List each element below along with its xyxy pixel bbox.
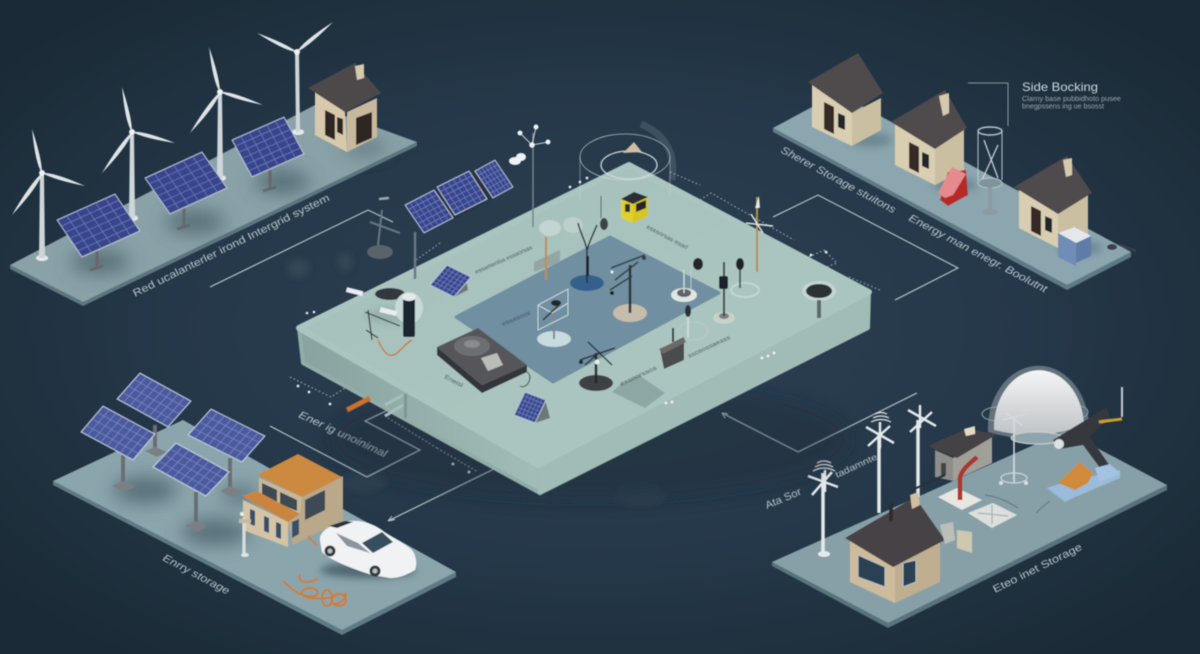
labels: bottom left bbox=[161, 409, 390, 597]
solar panels bbox=[57, 117, 304, 270]
small probes bbox=[673, 305, 708, 342]
small dark hut bbox=[659, 337, 686, 369]
glass ring sensor bbox=[580, 124, 673, 230]
left control cluster bbox=[346, 287, 423, 355]
orange and blue vehicle bbox=[1047, 462, 1120, 502]
dome bbox=[982, 366, 1089, 444]
sensor stand: ringed bbox=[671, 258, 703, 302]
labels: bottom right bbox=[763, 452, 1084, 596]
platform micro labels bbox=[443, 224, 732, 389]
labels: bottom left: Ener ig unoinimal bbox=[297, 409, 390, 461]
faint smudges bbox=[287, 253, 666, 506]
callout lines bbox=[210, 83, 1008, 521]
labels: top right: Sherer Storage stuitons bbox=[779, 144, 898, 217]
house bbox=[845, 475, 945, 603]
platform bbox=[773, 93, 1131, 290]
air turbines bbox=[808, 405, 936, 557]
supply boxes bbox=[940, 522, 972, 553]
panel: central platform bbox=[299, 124, 869, 493]
wind turbines bbox=[11, 20, 334, 261]
dark console bbox=[437, 328, 530, 393]
panel: solar and EV (bottom left) bbox=[53, 373, 456, 635]
shadows bbox=[70, 142, 387, 274]
house 2 bbox=[891, 90, 967, 185]
labels: bottom left: Enrry storage bbox=[161, 552, 232, 597]
white car bbox=[320, 521, 416, 578]
sensor stand: dark bbox=[579, 342, 615, 391]
small orange plug bbox=[308, 536, 317, 546]
orange cables bbox=[283, 574, 346, 606]
glass sensor mast bbox=[1000, 413, 1028, 484]
labels: top right: Energy man enegr. Boolutnt bbox=[907, 212, 1050, 296]
house shadows bbox=[848, 133, 1102, 255]
small solar panels bbox=[430, 265, 550, 423]
white plates and red pipe bbox=[938, 457, 1050, 528]
platform micro labels: Eneisl bbox=[443, 374, 464, 389]
house 1 bbox=[808, 53, 883, 146]
orange-roof building bbox=[242, 454, 343, 547]
callout: side booking: Clarny base pubbidhoto pusee bbox=[1022, 96, 1121, 103]
panel: air sensors and storage (bottom right) bbox=[772, 366, 1167, 628]
orange pole with grey box bbox=[534, 217, 583, 280]
platform bbox=[772, 431, 1167, 628]
orange pipe connector bbox=[347, 394, 407, 418]
weather pole and cloud bbox=[509, 124, 550, 227]
blue inner zone bbox=[456, 237, 719, 408]
labels: bottom right: Eteo inet Storage bbox=[991, 541, 1084, 596]
white connector dots bbox=[297, 177, 827, 473]
label: renewable system: Red ucalanterler irond Intergrid system bbox=[131, 192, 332, 300]
labels: bottom right: Ata Sor bbox=[763, 486, 804, 512]
platform micro labels: essasoos bbox=[501, 311, 531, 328]
sensor stand: column bbox=[713, 262, 735, 324]
platform bbox=[53, 420, 456, 635]
panel: houses (top right) bbox=[773, 53, 1136, 290]
callout: side booking bbox=[1022, 80, 1121, 110]
callout: side booking: Side Bocking bbox=[1022, 80, 1098, 94]
sensor stand: white with frame bbox=[537, 289, 571, 347]
blue battery box bbox=[1058, 227, 1091, 266]
house bbox=[308, 63, 381, 152]
red device bbox=[938, 167, 968, 206]
sensor stand: blue bbox=[570, 223, 604, 291]
platform micro labels: essoorssos bbox=[619, 365, 658, 388]
panel: renewable system (top left) bbox=[10, 20, 417, 306]
icon: grey stand outside platform bbox=[367, 198, 400, 259]
platform micro labels: ssosossaesss bbox=[687, 335, 732, 360]
labels: top right bbox=[779, 144, 1050, 296]
shadows bbox=[113, 477, 258, 545]
small tool bbox=[1107, 244, 1136, 251]
platform bbox=[10, 105, 417, 306]
sensor disc with halo bbox=[731, 258, 759, 297]
solar array bbox=[81, 373, 265, 532]
platform micro labels: esssorsas esarl bbox=[645, 224, 688, 251]
yellow unit bbox=[621, 192, 648, 223]
charging post bbox=[239, 512, 251, 557]
orange wind pole bbox=[746, 196, 773, 272]
black disc with halo bbox=[802, 281, 836, 318]
dark telescope bbox=[1053, 387, 1122, 468]
glass storage cylinder bbox=[978, 127, 1002, 215]
platform dots bbox=[665, 352, 775, 404]
callout: side booking: bnegpssens ing ue bsosst bbox=[1022, 104, 1104, 110]
platform base bbox=[299, 165, 869, 493]
sensor stand: beige bbox=[610, 255, 647, 322]
labels: bottom right: tadamnte bbox=[834, 452, 879, 480]
house 3 bbox=[1014, 156, 1092, 248]
platform shadow bbox=[330, 380, 850, 500]
platform micro labels: essamenlsa essaorsas bbox=[474, 245, 533, 276]
large solar array bbox=[405, 160, 513, 279]
small grey building bbox=[928, 426, 996, 481]
